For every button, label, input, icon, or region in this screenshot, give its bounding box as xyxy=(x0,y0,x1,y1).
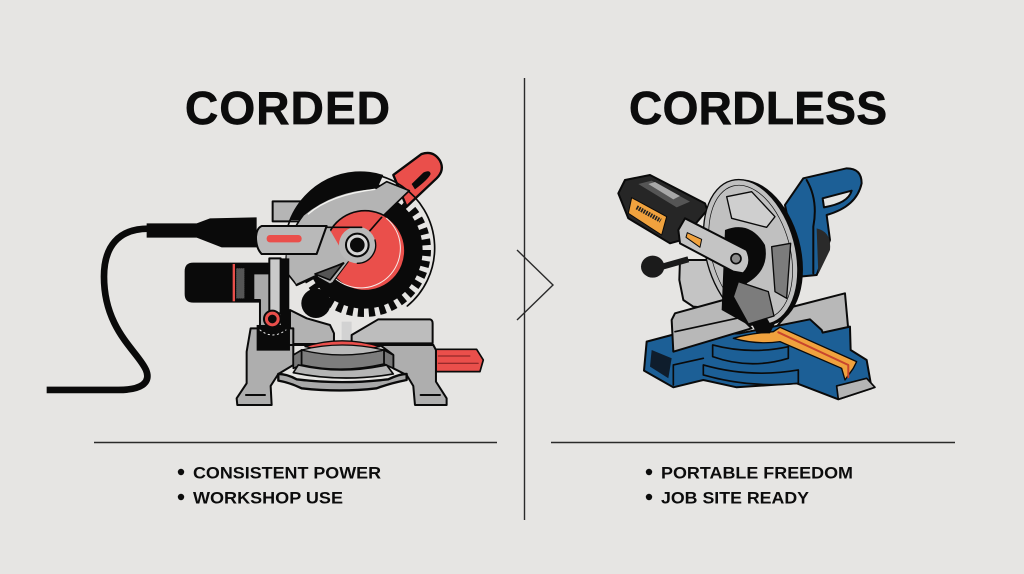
red blade hub disc xyxy=(325,211,405,291)
rear fence block xyxy=(273,201,303,221)
lower guard section xyxy=(287,230,348,285)
battery top face xyxy=(638,181,690,207)
knob xyxy=(641,256,664,278)
motor housing xyxy=(185,263,273,327)
locking knob xyxy=(301,289,331,318)
heading: corded: CORDED xyxy=(185,82,390,134)
lower linkage and base, in base-crop coordinates xyxy=(237,310,483,405)
knob shaft xyxy=(660,259,688,267)
rail grooves xyxy=(438,356,478,363)
base right block and foot xyxy=(380,345,447,405)
bullet list: cordless benefits xyxy=(646,464,853,508)
power cord xyxy=(47,217,257,390)
red rail slot xyxy=(778,332,848,377)
blue base, in base-crop coordinates xyxy=(644,300,875,399)
rear casting xyxy=(679,260,730,310)
orange turntable and rail xyxy=(733,327,857,380)
saw blade with teeth xyxy=(303,189,425,311)
bullet item: portable freedom: PORTABLE FREEDOM xyxy=(661,464,853,482)
disc blade guard xyxy=(688,168,818,337)
neck xyxy=(342,322,352,345)
right fence xyxy=(777,293,848,342)
handle grip opening xyxy=(412,171,431,189)
icon: corded miter saw xyxy=(47,153,483,405)
handle xyxy=(393,153,442,207)
base top edge xyxy=(673,358,703,385)
lower tier xyxy=(703,365,798,385)
battery label marks xyxy=(637,207,661,221)
battery pack, in battery-crop coordinates xyxy=(618,175,707,278)
upper tier xyxy=(713,345,788,364)
support column xyxy=(269,258,281,313)
turntable cylinder xyxy=(293,345,393,369)
left fence xyxy=(672,300,752,352)
icon: cordless miter saw xyxy=(618,168,875,399)
red rear rail xyxy=(436,349,483,372)
linkage xyxy=(290,310,334,344)
upper blade guard xyxy=(286,171,409,285)
black clamp block with red ring xyxy=(257,310,290,351)
platform line xyxy=(290,342,433,348)
arch bands xyxy=(278,365,407,390)
outer guard arc xyxy=(288,173,435,306)
foot slots xyxy=(246,392,440,398)
left fence ledge xyxy=(675,318,737,332)
battery label xyxy=(628,198,667,235)
pivot arm with orange badge xyxy=(678,218,749,273)
column shadow xyxy=(281,258,289,327)
base left block and foot xyxy=(237,328,293,405)
base window xyxy=(650,350,672,378)
red turntable xyxy=(305,341,380,351)
bullet item: job site ready: JOB SITE READY xyxy=(661,490,809,508)
battery body xyxy=(618,175,707,243)
bullet item: consistent power: CONSISTENT POWER xyxy=(193,464,381,482)
heading: cordless: CORDLESS xyxy=(629,82,887,134)
gray rail end tray xyxy=(837,378,875,399)
base body xyxy=(644,319,872,399)
bullet item: workshop use: WORKSHOP USE xyxy=(193,490,343,508)
arrow: chevron from corded to cordless xyxy=(517,250,553,320)
blue handle xyxy=(785,168,862,277)
bullet list: corded benefits xyxy=(178,464,381,508)
battery gauge panel xyxy=(648,182,680,199)
right fence xyxy=(352,319,433,343)
pivot arm xyxy=(256,226,376,263)
